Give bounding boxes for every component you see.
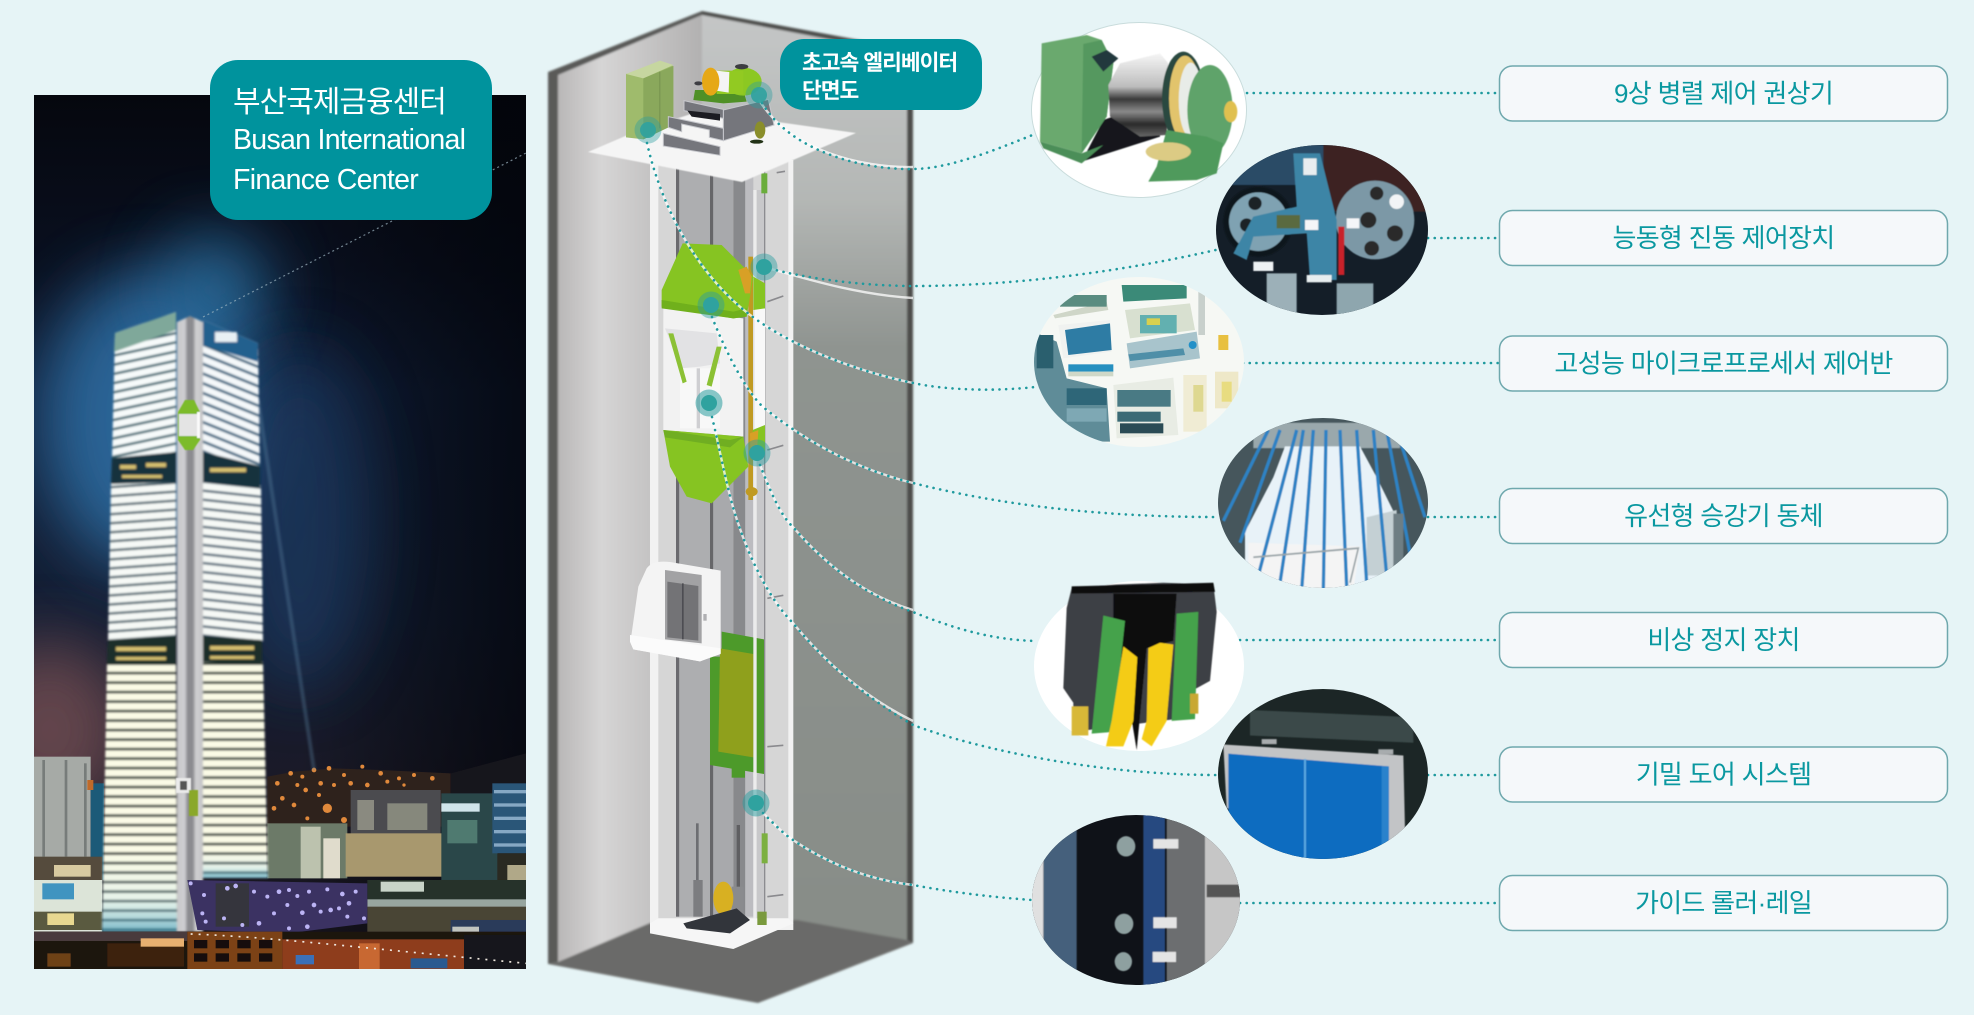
title callout: Busan International Finance Center	[210, 60, 492, 220]
city skyline behind tower	[34, 753, 526, 935]
label: streamlined car body: 유선형 승강기 동체	[1624, 501, 1823, 531]
machine room platform with cabinet and traction machine	[588, 61, 856, 182]
elevator shaft cross-section walls	[548, 11, 913, 1003]
label: active vibration control device: 능동형 진동 제어장치	[1612, 223, 1835, 253]
tower wings and core	[102, 312, 316, 932]
lobby door	[630, 562, 721, 661]
label: 9-phase parallel control hoist: 9상 병렬 제어 권상기	[1614, 78, 1833, 108]
traction machine	[693, 64, 762, 103]
title callout: Busan International Finance Center: Finance Center	[233, 164, 419, 196]
section callout: ultra-high-speed elevator cross-section: 초고속 엘리베이터	[802, 51, 957, 75]
section callout: ultra-high-speed elevator cross-section: 단면도	[802, 79, 859, 103]
dotted guide from tower top	[203, 153, 526, 317]
connector curves from hotspots to component photos	[647, 93, 1499, 903]
governor	[750, 121, 765, 144]
counterweight	[710, 632, 764, 778]
label: guide roller and rail	[1500, 876, 1948, 930]
control cabinet	[626, 61, 673, 139]
photo: active vibration control device	[1216, 145, 1428, 315]
label: airtight door system	[1500, 747, 1948, 802]
lobby door, counterweight and pit equipment	[630, 500, 768, 933]
label: guide roller and rail: 가이드 롤러·레일	[1635, 888, 1812, 918]
photo: guide roller and rail	[1030, 810, 1245, 990]
foreground plaza and low-rise buildings	[34, 880, 526, 970]
elevator hoistway frame and rails	[650, 160, 793, 949]
label: high-performance microprocessor control panel: 고성능 마이크로프로세서 제어반	[1554, 348, 1893, 378]
photo: airtight door system	[1218, 689, 1428, 859]
title callout: Busan International Finance Center: Busan International	[233, 124, 465, 156]
label: active vibration control device	[1500, 210, 1948, 266]
label: airtight door system: 기밀 도어 시스템	[1636, 760, 1811, 790]
machine base frame	[663, 99, 774, 155]
section callout: ultra-high-speed elevator cross-section	[780, 39, 982, 110]
photo: emergency stop device	[1034, 581, 1244, 751]
photo: Busan International Finance Center tower at night	[0, 95, 526, 970]
label: 9-phase parallel control hoist	[1500, 66, 1948, 121]
elevator car	[662, 243, 765, 503]
photo: hoisting machine	[1032, 22, 1246, 198]
photo: microprocessor control panel	[1030, 275, 1250, 450]
label: streamlined car body	[1500, 488, 1948, 544]
label: emergency stop device: 비상 정지 장치	[1647, 625, 1800, 655]
title callout: Busan International Finance Center: 부산국제금융센터	[233, 86, 446, 119]
label: high-performance microprocessor control panel	[1500, 336, 1948, 391]
label: emergency stop device	[1500, 612, 1948, 668]
pit buffer assembly	[683, 823, 768, 933]
photo: streamlined hoistway car body	[1218, 418, 1428, 588]
mini lobby and counterweight on tower	[176, 778, 198, 816]
hotspot markers	[634, 82, 778, 816]
mini elevator car on tower	[178, 400, 200, 450]
